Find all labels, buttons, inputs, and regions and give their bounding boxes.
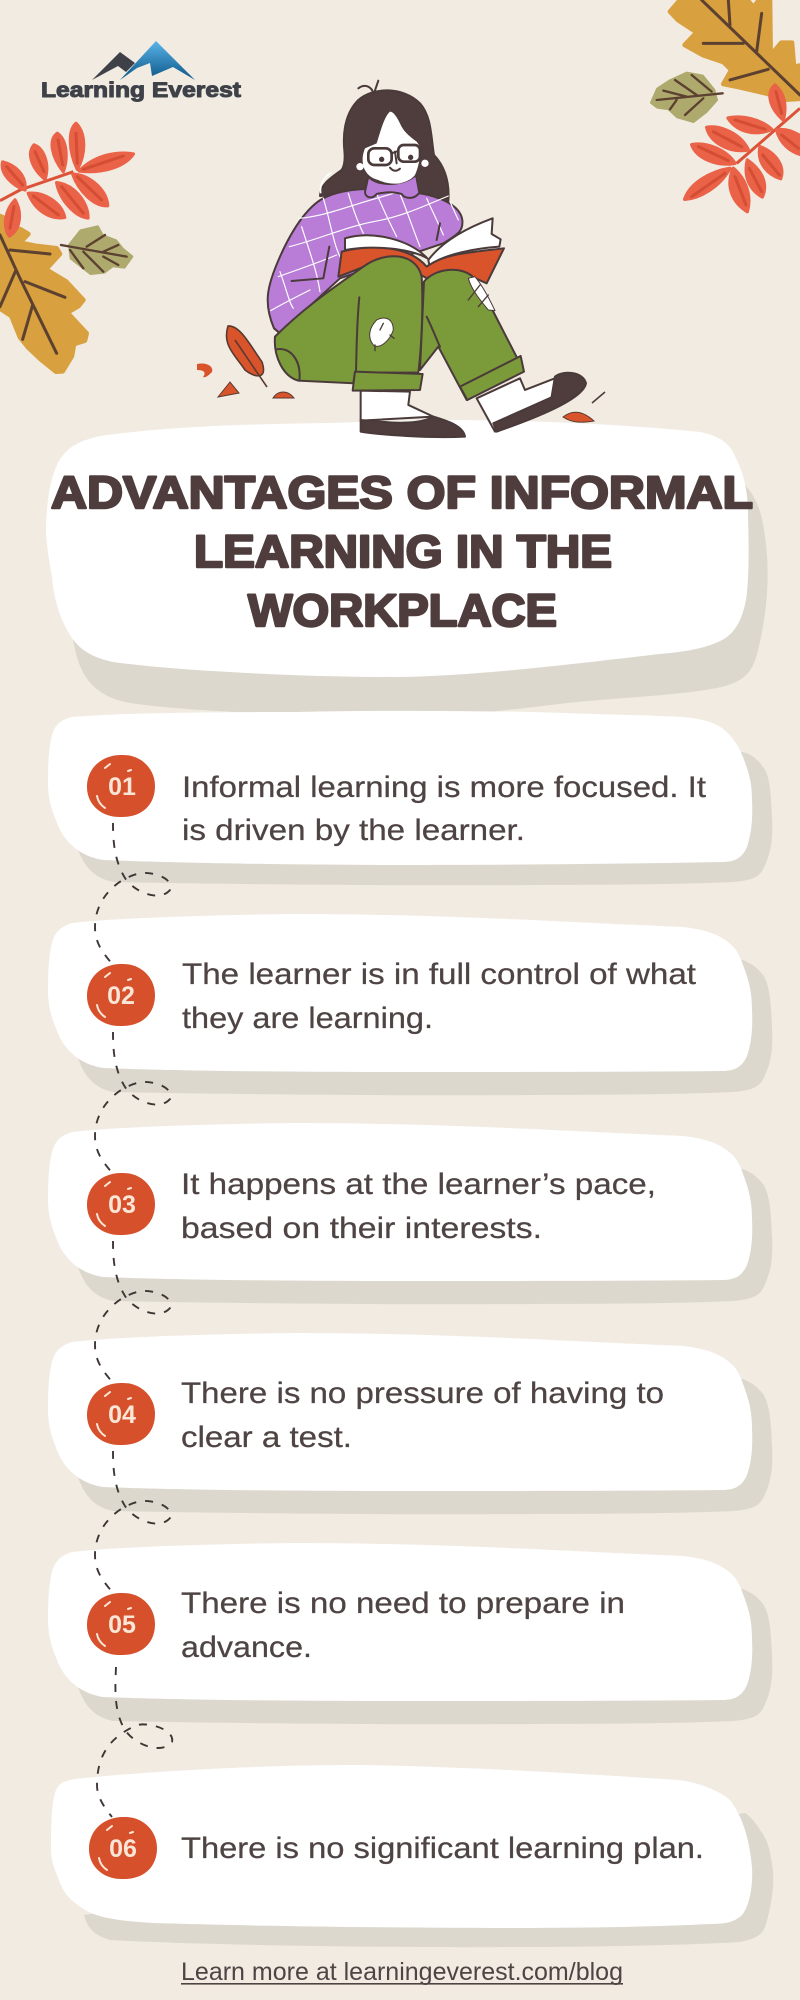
panel: step 2 bbox=[48, 914, 772, 1095]
badge 04: 04 bbox=[108, 1401, 136, 1429]
card bbox=[51, 1765, 752, 1928]
card bbox=[48, 1123, 752, 1281]
step text bbox=[181, 1168, 656, 1245]
turtleneck bbox=[365, 175, 419, 198]
dashed connector 5 to 6 bbox=[97, 1667, 172, 1817]
step text: There is no significant learning plan. bbox=[181, 1832, 704, 1865]
hair bbox=[320, 90, 449, 202]
red fern leaf bbox=[685, 85, 800, 212]
illustration: girl reading a book bbox=[268, 81, 586, 437]
icon: mountain peaks bbox=[92, 41, 195, 80]
dashed connector 4 to 5 bbox=[95, 1451, 171, 1593]
panel: step 4 bbox=[48, 1333, 772, 1514]
dashed connector 3 to 4 bbox=[95, 1241, 171, 1383]
dashed connector 1 to 2 bbox=[95, 823, 171, 965]
olive leaf bbox=[651, 73, 723, 122]
badge 02: 02 bbox=[107, 982, 135, 1010]
book bbox=[338, 218, 504, 283]
card shadow bbox=[78, 1169, 772, 1304]
step text: clear a test. bbox=[181, 1421, 352, 1454]
red fern leaf bbox=[0, 123, 133, 236]
step text: There is no need to prepare in bbox=[181, 1587, 625, 1620]
step text: The learner is in full control of what bbox=[182, 958, 697, 991]
sweater bbox=[268, 189, 462, 333]
panel: step 5 bbox=[48, 1543, 772, 1724]
step text: is driven by the learner. bbox=[182, 814, 525, 847]
oak leaf bbox=[0, 216, 87, 372]
footer link: Learn more at learningeverest.com/blog bbox=[181, 1958, 623, 1986]
oak leaf bbox=[670, 0, 800, 100]
badge 05 bbox=[87, 1593, 155, 1655]
dashed connector 2 to 3 bbox=[95, 1032, 171, 1174]
badge 03 bbox=[87, 1173, 155, 1235]
badge 06 bbox=[89, 1817, 157, 1879]
glasses bbox=[368, 145, 420, 165]
panel: step 6 bbox=[51, 1765, 773, 1947]
step text bbox=[182, 958, 697, 1035]
badge 03: 03 bbox=[108, 1191, 136, 1219]
badge 01 bbox=[87, 755, 155, 817]
step text: Informal learning is more focused. It bbox=[182, 771, 707, 804]
panel: step 3 bbox=[48, 1123, 772, 1304]
title panel shadow bbox=[73, 483, 768, 717]
heading: WORKPLACE bbox=[248, 585, 557, 636]
heading: LEARNING IN THE bbox=[194, 526, 612, 577]
title panel bbox=[46, 420, 749, 677]
step text: based on their interests. bbox=[181, 1212, 542, 1245]
card bbox=[48, 914, 752, 1072]
fallen leaves bbox=[197, 326, 605, 422]
socks bbox=[361, 378, 555, 432]
trousers bbox=[275, 256, 524, 400]
card shadow bbox=[78, 1589, 772, 1724]
card shadow bbox=[78, 752, 772, 885]
step text: they are learning. bbox=[182, 1002, 433, 1035]
step text: It happens at the learner’s pace, bbox=[181, 1168, 656, 1201]
card bbox=[48, 1543, 752, 1701]
card bbox=[48, 711, 752, 865]
card shadow bbox=[78, 960, 772, 1095]
badge 02 bbox=[87, 964, 155, 1026]
badge 04 bbox=[87, 1383, 155, 1445]
card bbox=[48, 1333, 752, 1491]
step text bbox=[181, 1377, 664, 1454]
badge 06: 06 bbox=[109, 1835, 137, 1863]
badge 05: 05 bbox=[108, 1611, 136, 1639]
logo: Learning Everest bbox=[41, 41, 241, 102]
face bbox=[356, 112, 429, 184]
badge 01: 01 bbox=[108, 773, 136, 801]
step text: There is no pressure of having to bbox=[181, 1377, 664, 1410]
olive leaf bbox=[61, 227, 132, 274]
card shadow bbox=[78, 1379, 772, 1514]
logo wordmark: Learning Everest bbox=[41, 79, 241, 102]
leaves: top-right cluster bbox=[651, 0, 800, 212]
step text: advance. bbox=[181, 1631, 312, 1664]
step text bbox=[181, 1587, 625, 1664]
step text bbox=[182, 771, 707, 847]
shoes bbox=[361, 373, 586, 437]
heading: ADVANTAGES OF INFORMAL bbox=[51, 467, 753, 518]
card shadow bbox=[84, 1813, 773, 1947]
panel: title bbox=[46, 420, 768, 717]
leaves: top-left cluster bbox=[0, 123, 133, 372]
heading bbox=[51, 467, 753, 636]
panel: step 1 bbox=[48, 711, 772, 885]
